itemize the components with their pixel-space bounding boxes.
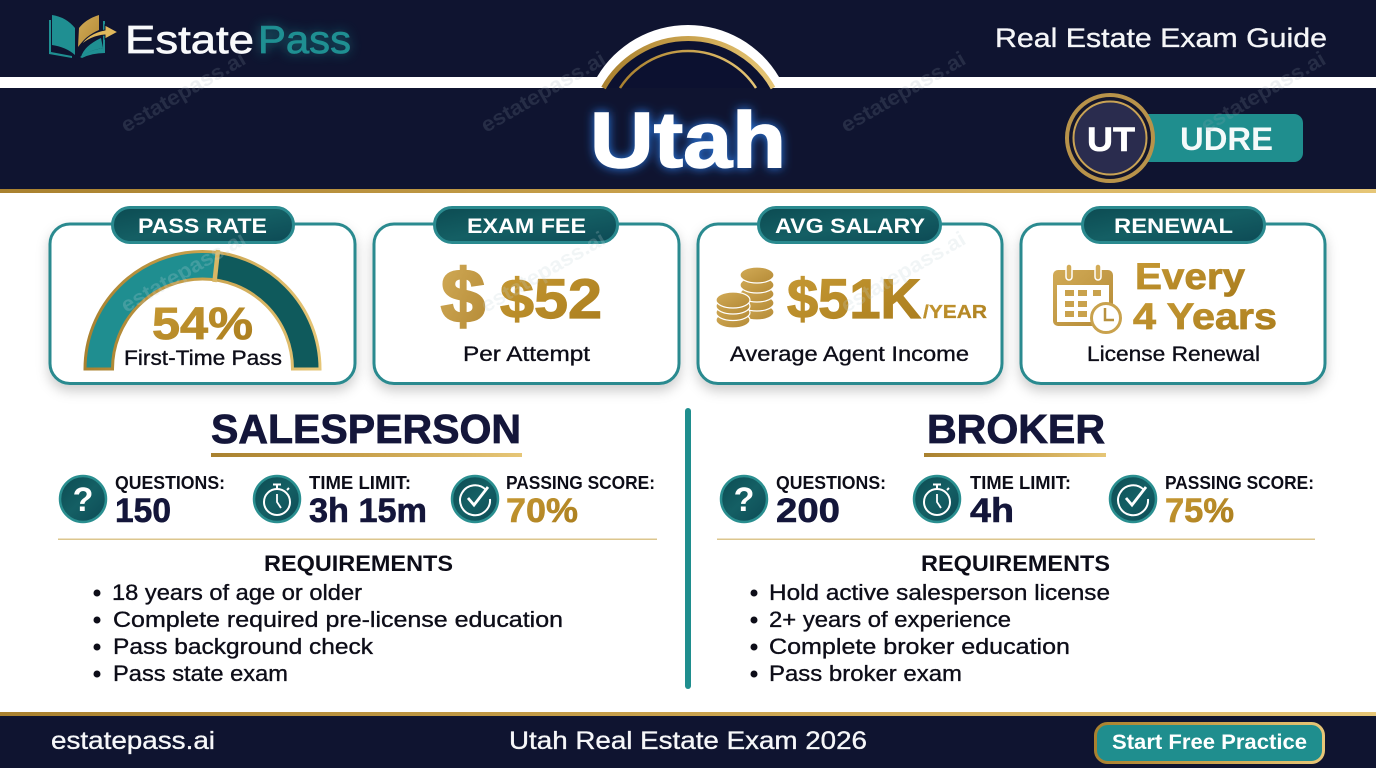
requirements list: Pass state exam bbox=[113, 661, 288, 686]
stat: time limit bbox=[254, 473, 427, 530]
watermarks: estatepass.ai bbox=[117, 47, 250, 137]
panel: renewal bbox=[1021, 208, 1325, 384]
wordmark glow: Pass bbox=[258, 19, 351, 62]
UT seal: UT bbox=[1087, 121, 1135, 159]
pill heading: EXAM FEE bbox=[467, 215, 586, 238]
requirements heading: REQUIREMENTS bbox=[921, 551, 1110, 576]
requirements list: Pass broker exam bbox=[769, 661, 962, 686]
pill heading: AVG SALARY bbox=[775, 215, 925, 238]
requirements list: 2+ years of experience bbox=[769, 607, 1011, 632]
requirements list bbox=[94, 580, 563, 686]
icon: stopwatch bbox=[254, 476, 300, 522]
stat value: 75% bbox=[1165, 492, 1234, 530]
icon: question mark bbox=[721, 476, 767, 522]
heading underline bbox=[211, 453, 522, 457]
heading: BROKER bbox=[927, 406, 1105, 452]
watermarks: estatepass.ai bbox=[117, 227, 250, 317]
footer title: Utah Real Estate Exam 2026 bbox=[509, 727, 867, 755]
wordmark Estate: Estate bbox=[125, 19, 254, 62]
watermarks: estatepass.ai bbox=[477, 47, 610, 137]
value: $52 bbox=[500, 267, 602, 330]
stat value: 70% bbox=[506, 492, 578, 530]
stat: passing score bbox=[1110, 473, 1314, 530]
caption: First-Time Pass bbox=[124, 347, 282, 370]
logo bbox=[49, 15, 351, 62]
stat: passing score bbox=[452, 473, 655, 530]
stat value: 3h 15m bbox=[309, 492, 427, 530]
icon: question mark: ? bbox=[734, 481, 754, 519]
requirements list: Complete required pre-license education bbox=[113, 607, 563, 632]
footer site: estatepass.ai bbox=[51, 727, 215, 755]
icon: coin stacks bbox=[716, 267, 774, 328]
call to action button bbox=[1096, 724, 1324, 762]
value unit: /YEAR bbox=[923, 302, 987, 322]
icon: open book with arrow bbox=[49, 15, 118, 58]
requirements list: Hold active salesperson license bbox=[769, 580, 1110, 605]
stat label: QUESTIONS: bbox=[115, 473, 225, 493]
icon: check circle bbox=[452, 476, 498, 522]
panel: exam fee bbox=[374, 208, 679, 384]
header arch bbox=[597, 25, 779, 88]
watermarks: estatepass.ai bbox=[1197, 47, 1330, 137]
watermarks bbox=[117, 47, 1330, 317]
requirements heading: REQUIREMENTS bbox=[264, 551, 453, 576]
pill heading: RENEWAL bbox=[1114, 215, 1233, 238]
requirements list: Pass background check bbox=[113, 634, 374, 659]
stat label: QUESTIONS: bbox=[776, 473, 886, 493]
UDRE pill: UDRE bbox=[1180, 121, 1273, 157]
requirements list: Complete broker education bbox=[769, 634, 1070, 659]
pill heading bbox=[1082, 208, 1264, 242]
caption: Average Agent Income bbox=[730, 343, 969, 366]
watermarks: estatepass.ai bbox=[477, 227, 610, 317]
panel: salesperson bbox=[58, 406, 657, 686]
value line 1: Every bbox=[1135, 256, 1245, 297]
call to action button: Start Free Practice bbox=[1112, 731, 1307, 754]
requirements list bbox=[750, 580, 1110, 686]
stat: questions bbox=[60, 473, 225, 530]
icon: calendar and clock bbox=[1053, 264, 1120, 332]
stat label: TIME LIMIT: bbox=[970, 473, 1071, 493]
watermarks: estatepass.ai bbox=[837, 227, 970, 317]
footer bbox=[0, 712, 1376, 768]
heading underline bbox=[924, 453, 1106, 457]
value: 54% bbox=[152, 298, 253, 349]
divider bbox=[717, 538, 1315, 540]
value: $51K bbox=[787, 267, 921, 330]
icon: stopwatch bbox=[914, 476, 960, 522]
pill heading bbox=[112, 208, 294, 242]
icon: dollar sign: $ bbox=[441, 254, 485, 338]
stat value: 200 bbox=[776, 492, 840, 530]
caption: License Renewal bbox=[1087, 343, 1260, 366]
header guide label: Real Estate Exam Guide bbox=[995, 23, 1327, 53]
pill heading bbox=[434, 208, 618, 242]
value line 2: 4 Years bbox=[1133, 296, 1277, 337]
pill heading: PASS RATE bbox=[138, 215, 267, 238]
wordmark Pass: Pass bbox=[258, 19, 351, 62]
icon: question mark: ? bbox=[73, 481, 93, 519]
icon: check circle bbox=[1110, 476, 1156, 522]
heading: SALESPERSON bbox=[211, 406, 521, 452]
UDRE pill bbox=[1130, 114, 1303, 162]
pill heading bbox=[758, 208, 940, 242]
header band bbox=[0, 0, 1376, 193]
stat: time limit bbox=[914, 473, 1071, 530]
state title: Utah bbox=[590, 95, 786, 184]
panel: broker bbox=[717, 406, 1315, 686]
watermarks: estatepass.ai bbox=[837, 47, 970, 137]
divider bbox=[58, 538, 657, 540]
stat label: PASSING SCORE: bbox=[506, 473, 655, 493]
panel: pass rate bbox=[50, 208, 355, 384]
requirements list: 18 years of age or older bbox=[112, 580, 362, 605]
state title: Utah bbox=[590, 95, 786, 184]
stat value: 4h bbox=[970, 492, 1014, 530]
panel: average salary bbox=[698, 208, 1002, 384]
caption: Per Attempt bbox=[463, 343, 590, 366]
gauge chart bbox=[85, 250, 320, 369]
stat value: 150 bbox=[115, 492, 171, 530]
stat label: PASSING SCORE: bbox=[1165, 473, 1314, 493]
state badge bbox=[1067, 95, 1303, 181]
column divider bbox=[685, 408, 691, 689]
stat: questions bbox=[721, 473, 886, 530]
stat label: TIME LIMIT: bbox=[309, 473, 411, 493]
UT seal bbox=[1067, 95, 1153, 181]
icon: question mark bbox=[60, 476, 106, 522]
